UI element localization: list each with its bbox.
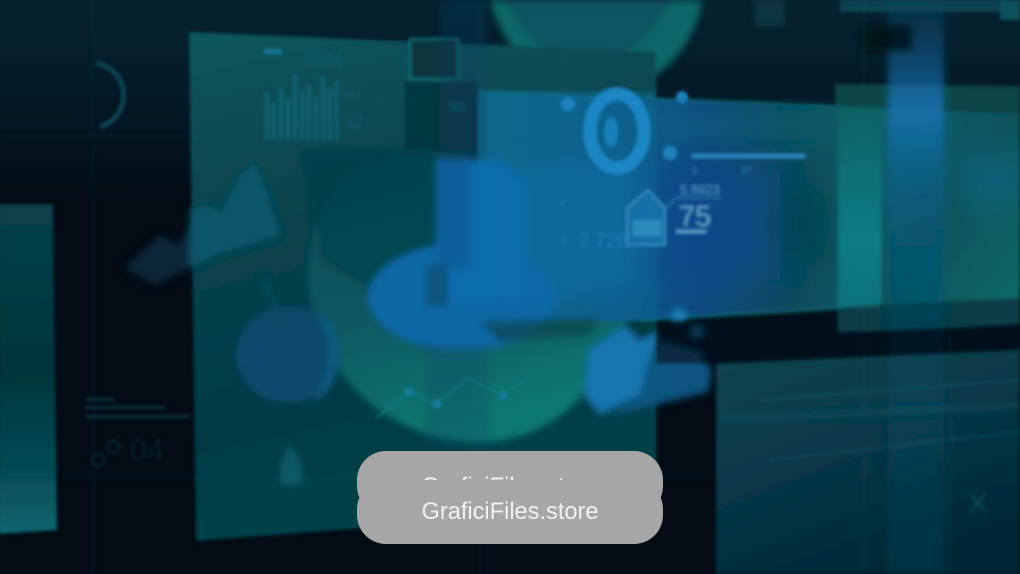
dark gutter below right panel: [656, 310, 1020, 364]
side face of right panel: [838, 108, 882, 309]
chart labels: 36M: [303, 49, 342, 71]
label: GraficiFiles.store: GraficiFiles.store: [422, 499, 598, 525]
bulb house icon: [627, 190, 665, 245]
data readout: 75: [679, 201, 711, 233]
data readout: [640, 154, 805, 244]
lower column: [425, 345, 490, 445]
ring gauge left: [97, 63, 124, 127]
data readout: 5.9923: [680, 182, 720, 197]
side metric text: [449, 99, 628, 252]
left small data labels: [85, 398, 190, 467]
top sphere fragment: [490, 0, 702, 96]
data readout: 37: [740, 165, 752, 177]
hidden label: GraficiFiles.store: [422, 474, 598, 500]
mountain area chart: [125, 162, 280, 285]
chart labels: PU: [343, 88, 361, 103]
small pawn icon: [280, 442, 302, 485]
chart labels: [303, 49, 363, 132]
square outline icon: [410, 39, 458, 79]
bottom-right panel: [716, 350, 1020, 574]
dark shadow band under hub: [480, 318, 600, 342]
left gauge dial: [236, 278, 340, 403]
folder stack shape: [584, 308, 712, 416]
right vertical light band: [888, 0, 944, 350]
side metric text: 2.726: [578, 230, 628, 252]
donut icon: [561, 91, 688, 168]
line chart on sphere: [376, 372, 540, 418]
bar chart: [264, 49, 338, 140]
left edge panel: [0, 204, 57, 534]
far right panel: [835, 84, 1020, 332]
dark inner panel over sphere top: [300, 150, 436, 290]
dark gap behind square: [405, 82, 477, 172]
data readout: 0: [692, 165, 698, 177]
top-right dim blocks: [755, 0, 1020, 50]
blue wash right of hub: [527, 165, 640, 290]
large sphere: [308, 150, 640, 442]
caption badge: [357, 451, 663, 544]
back pill with covered text: [357, 451, 663, 515]
hub 3D shape: [368, 158, 556, 351]
left small data labels: 04: [130, 434, 163, 467]
main translucent panel: [189, 32, 656, 541]
side metric text: 50: [449, 99, 465, 115]
front pill with label: [357, 480, 663, 544]
chart labels: 52: [343, 112, 363, 132]
right floating panel: [478, 91, 882, 322]
central vertical light band: [440, 0, 486, 160]
